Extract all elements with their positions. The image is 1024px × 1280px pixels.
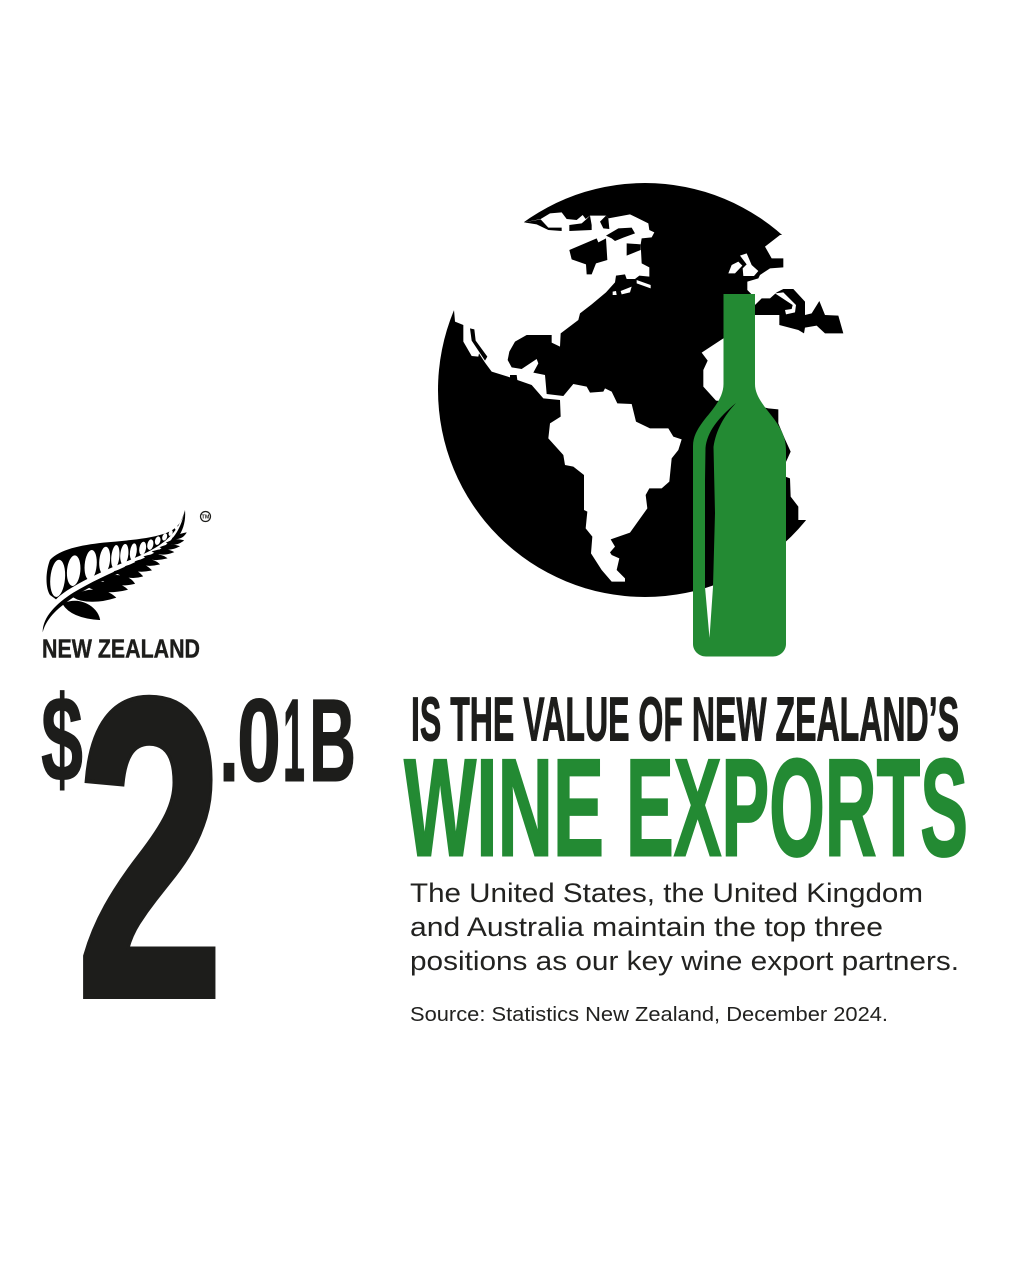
trademark symbol: TM [202,514,210,520]
body text [410,878,959,976]
body text: positions as our key wine export partners. [410,946,959,976]
wordmark: New Zealand: NEW ZEALAND [42,634,200,664]
icon: green wine bottle [693,294,786,656]
heading: wine exports: WINE [404,730,604,886]
body text: The United States, the United Kingdom [410,878,923,908]
trademark symbol [200,512,210,522]
dollar sign: $ [41,671,83,807]
icon: silver fern [43,510,185,632]
decimal portion .01B: 0 [237,675,281,807]
decimal portion .01B: . [219,675,239,807]
decimal portion .01B: 1 [283,675,305,807]
logo: silver fern with New Zealand wordmark [42,510,210,664]
decimal portion .01B: B [309,675,356,807]
big figure: $2.01B [41,609,356,1089]
large numeral 2: 2 [75,609,225,1089]
icon: globe with continents [430,170,897,597]
body text: and Australia maintain the top three [410,912,883,942]
source note: Source: Statistics New Zealand, December 2024. [410,1004,888,1026]
